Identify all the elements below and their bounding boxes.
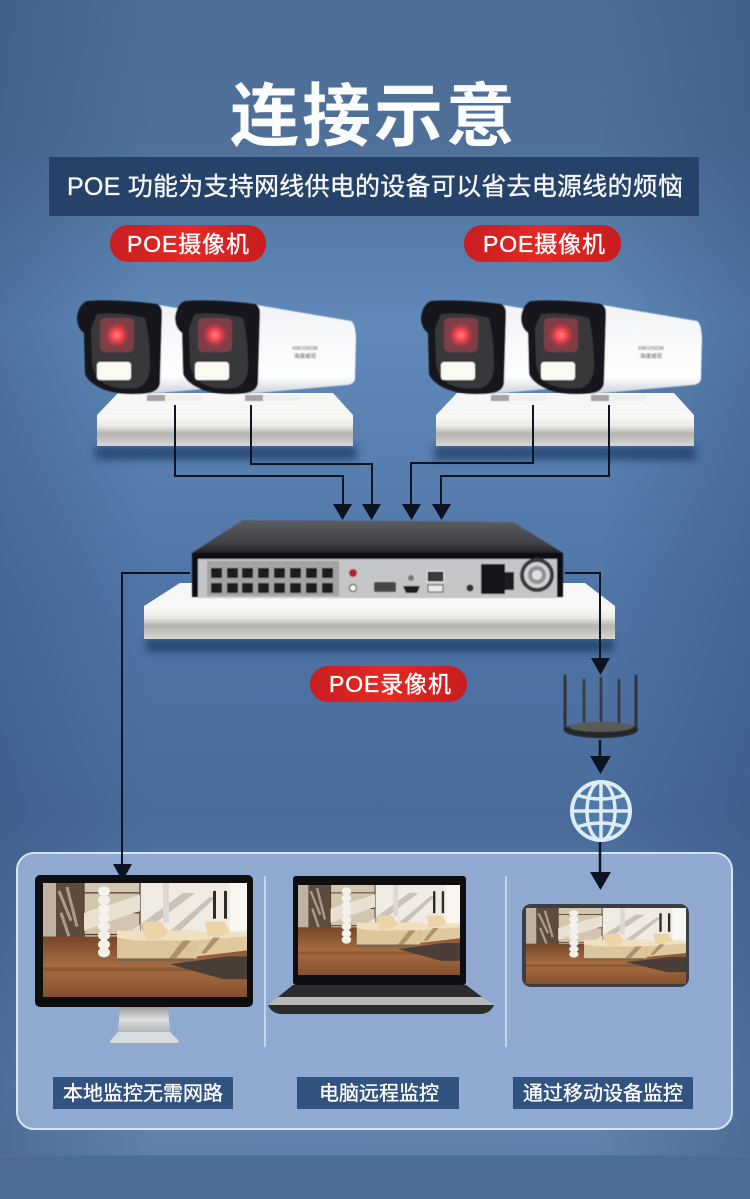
title: 连接示意 <box>230 78 515 155</box>
label: recorder: POE录像机 <box>329 671 451 697</box>
connection line: recorder to router <box>565 573 610 675</box>
POE recorder device <box>192 520 563 598</box>
arrowheads: into recorder <box>333 504 451 520</box>
platform: recorder <box>144 583 615 652</box>
caption: computer <box>297 1077 459 1109</box>
connection line: recorder to monitor <box>122 573 190 866</box>
caption: local: 本地监控无需网路 <box>63 1082 223 1105</box>
connection lines: cameras to recorder <box>175 405 609 506</box>
subtitle banner: POE 功能为支持网线供电的设备可以省去电源线的烦恼 <box>67 173 683 201</box>
label: right cameras: POE摄像机 <box>483 231 605 257</box>
caption: computer: 电脑远程监控 <box>319 1082 439 1105</box>
arrow: router to globe <box>590 740 611 774</box>
arrow: into monitor <box>113 864 132 881</box>
caption: local <box>53 1077 233 1109</box>
panel: viewing devices <box>17 853 732 1129</box>
label: right cameras <box>464 225 621 262</box>
icon: desktop monitor <box>35 875 253 1043</box>
label: left cameras <box>110 225 266 262</box>
subtitle banner <box>49 157 699 216</box>
line into monitor <box>121 852 123 866</box>
platform: left cameras <box>95 393 357 460</box>
right camera pair <box>421 300 702 401</box>
icon: router <box>564 676 638 738</box>
caption: mobile <box>513 1077 693 1109</box>
icon: laptop <box>268 876 494 1014</box>
left camera pair <box>77 300 356 401</box>
platform: right cameras <box>434 393 696 460</box>
label: recorder <box>310 666 467 702</box>
caption: mobile: 通过移动设备监控 <box>523 1082 683 1105</box>
connection line: globe to phone <box>590 842 611 890</box>
label: left cameras: POE摄像机 <box>127 231 249 257</box>
icon: globe <box>572 782 630 840</box>
icon: smartphone <box>522 904 689 987</box>
